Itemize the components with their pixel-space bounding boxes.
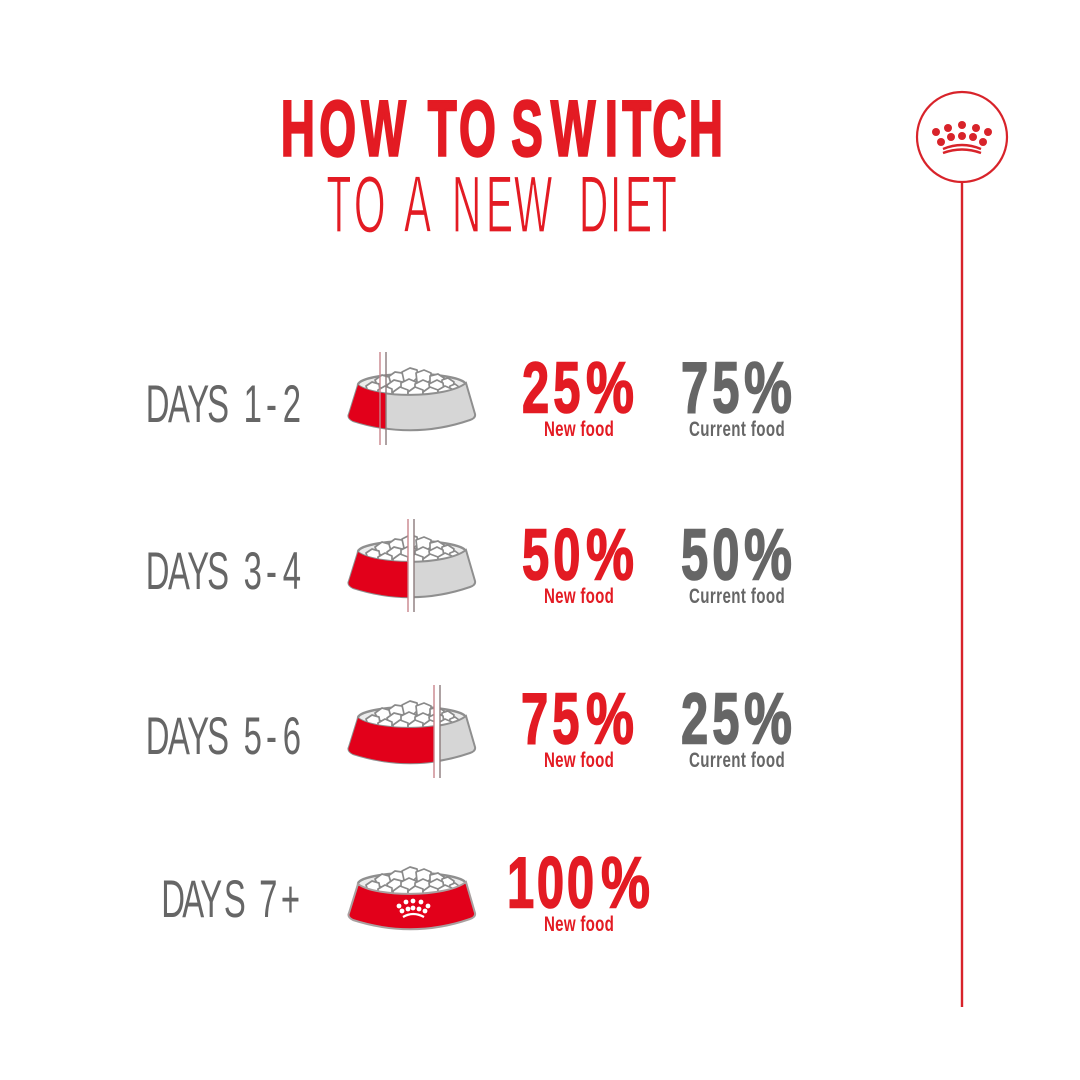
title: TO A NEW DIET [326,159,677,250]
stat: 75 percent new food: New food [544,747,614,772]
stat: 50 percent new food: 50 [522,515,581,596]
stat: 50 percent current food [681,515,792,608]
title: HOW TO SWITCH [281,84,723,172]
icon: bowl 25 percent [348,352,475,445]
row: days 1-2 [146,348,792,445]
label: days 1-2: DAYS 1-2 [146,375,301,434]
icon: bowl 50 percent [348,519,475,612]
stat: 100 percent new food: New food [544,911,614,936]
stat: 50 percent new food: % [586,516,634,596]
label: days 7+: DAYS 7+ [161,870,300,929]
stat: 100 percent new food: 100 [507,843,594,924]
row: days 3-4 [146,515,792,612]
stat: 75 percent new food: 75 [521,679,580,760]
stat: 25 percent new food: % [586,348,634,428]
stat: 50 percent current food: Current food [689,583,785,608]
stat: 50 percent new food: New food [544,583,614,608]
stat: 50 percent new food [522,515,634,608]
stat: 25 percent new food [522,348,634,441]
stat: 75 percent new food: % [586,680,634,760]
stat: 25 percent new food: 25 [522,348,581,429]
stat: 100 percent new food: % [601,844,650,924]
icon: full red bowl with crown [348,867,475,929]
stat: 75 percent current food: % [744,348,792,428]
stat: 75 percent current food: Current food [689,416,785,441]
label: days 3-4: DAYS 3-4 [146,542,301,601]
stat: 75 percent new food [521,679,634,772]
title [281,84,723,250]
stat: 25 percent current food [681,679,792,772]
icon: bowl 75 percent [348,685,475,778]
stat: 50 percent current food: % [744,516,792,596]
stat: 75 percent current food [681,348,792,441]
label: days 5-6: DAYS 5-6 [146,707,301,766]
stat: 100 percent new food [507,843,650,936]
stat: 25 percent new food: New food [544,416,614,441]
stat: 25 percent current food: % [744,680,792,760]
stat: 25 percent current food: Current food [689,747,785,772]
row: days 7+ [161,843,650,936]
stat: 50 percent current food: 50 [681,515,740,596]
stat: 75 percent current food: 75 [681,348,740,429]
icon: crown logo with vertical line [917,92,1007,1007]
row: days 5-6 [146,679,792,778]
stat: 25 percent current food: 25 [681,679,740,760]
